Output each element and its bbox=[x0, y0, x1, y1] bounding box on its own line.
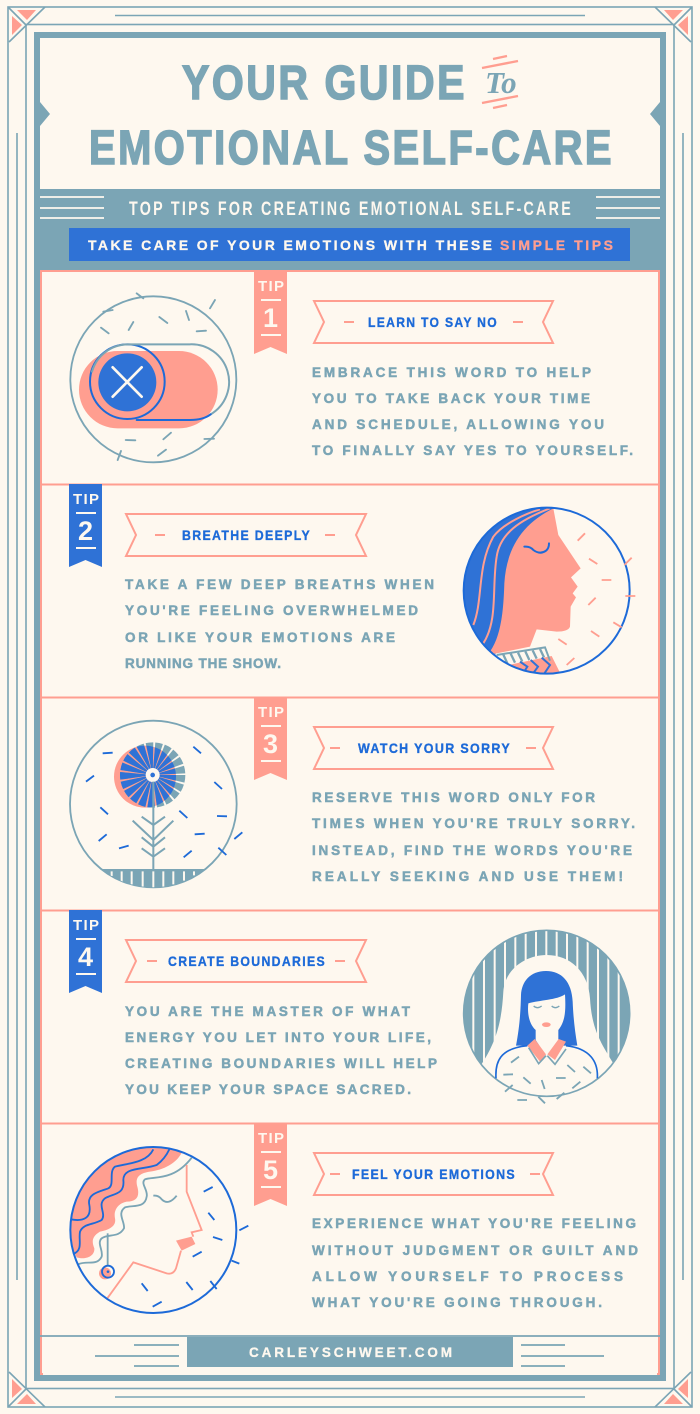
tip 3 text: RESERVE THIS WORD ONLY FOR bbox=[312, 790, 595, 805]
tip 1 text: TO FINALLY SAY YES TO YOURSELF. bbox=[312, 443, 633, 458]
icon: woman breathing profile bbox=[460, 507, 635, 677]
tip 3 ribbon bbox=[254, 698, 287, 780]
tip 1 ribbon: 1 bbox=[263, 303, 278, 333]
tip 3 heading: WATCH YOUR SORRY bbox=[358, 740, 511, 756]
panel outline bbox=[41, 271, 659, 1374]
tip 2 ribbon: 2 bbox=[78, 516, 93, 546]
tip 5 text: ALLOW YOURSELF TO PROCESS bbox=[312, 1269, 623, 1284]
tip 4 ribbon: TIP bbox=[73, 917, 99, 934]
tip 5 ribbon: 5 bbox=[263, 1155, 278, 1185]
tip 1 heading: LEARN TO SAY NO bbox=[368, 314, 498, 330]
tip 2 text bbox=[125, 577, 434, 671]
tip 4 text: YOU ARE THE MASTER OF WHAT bbox=[125, 1004, 411, 1019]
blue banner: SIMPLE TIPS bbox=[500, 237, 613, 253]
tip 1 ribbon: TIP bbox=[258, 278, 284, 295]
blue banner: TAKE CARE OF YOUR EMOTIONS WITH THESE bbox=[88, 237, 492, 253]
tip 5 ribbon: TIP bbox=[258, 1130, 284, 1147]
tip 2 text: YOU'RE FEELING OVERWHELMED bbox=[125, 603, 418, 618]
tip 4 ribbon: 4 bbox=[78, 942, 93, 972]
tip 2 heading bbox=[126, 514, 366, 556]
tip 1 text: EMBRACE THIS WORD TO HELP bbox=[312, 365, 591, 380]
tip 5 heading: FEEL YOUR EMOTIONS bbox=[352, 1166, 516, 1182]
tip 5 heading bbox=[314, 1153, 553, 1195]
tip 3 text: REALLY SEEKING AND USE THEM! bbox=[312, 869, 623, 884]
tip 2 ribbon bbox=[69, 484, 102, 567]
tip 4 text: ENERGY YOU LET INTO YOUR LIFE, bbox=[125, 1030, 431, 1045]
title word: to bbox=[482, 56, 518, 108]
panel: tip 5 bbox=[63, 1124, 638, 1313]
tip 5 ribbon bbox=[254, 1124, 287, 1206]
tip 1 text: YOU TO TAKE BACK YOUR TIME bbox=[312, 391, 590, 406]
footer label: CARLEYSCHWEET.COM bbox=[249, 1345, 452, 1360]
footer bbox=[40, 1336, 660, 1375]
icon: toggle switch bbox=[70, 293, 236, 462]
header band bbox=[40, 189, 660, 271]
panel: tip 3 bbox=[67, 698, 635, 889]
panel: tip 2 bbox=[69, 484, 635, 677]
tip 5 text: WHAT YOU'RE GOING THROUGH. bbox=[312, 1295, 602, 1310]
tip 2 ribbon: TIP bbox=[73, 491, 99, 508]
tip 1 heading bbox=[314, 301, 553, 343]
tip 1 ribbon bbox=[254, 271, 287, 354]
tip 3 text: TIMES WHEN YOU'RE TRULY SORRY. bbox=[312, 816, 635, 831]
tip 4 ribbon bbox=[69, 910, 102, 993]
tip 4 heading: CREATE BOUNDARIES bbox=[168, 953, 326, 969]
tip 4 text bbox=[125, 1004, 437, 1097]
tip 5 text: EXPERIENCE WHAT YOU'RE FEELING bbox=[312, 1216, 636, 1231]
tip 1 text: AND SCHEDULE, ALLOWING YOU bbox=[312, 417, 604, 432]
tip 2 text: OR LIKE YOUR EMOTIONS ARE bbox=[125, 630, 395, 645]
tip 2 text: RUNNING THE SHOW. bbox=[125, 656, 281, 671]
title block bbox=[40, 56, 660, 175]
panel: tip 1 bbox=[70, 271, 633, 462]
tip 5 text: WITHOUT JUDGMENT OR GUILT AND bbox=[312, 1243, 638, 1258]
tip 3 heading bbox=[314, 727, 553, 769]
icon: profile with wavy hair bbox=[63, 1147, 248, 1313]
tip 5 text bbox=[312, 1216, 638, 1310]
tip 4 heading bbox=[126, 940, 366, 982]
footer label bbox=[187, 1337, 513, 1367]
icon: flower bbox=[67, 721, 242, 889]
tip 2 text: TAKE A FEW DEEP BREATHS WHEN bbox=[125, 577, 434, 592]
icon: woman with boundary bbox=[460, 928, 633, 1103]
tip 3 ribbon: TIP bbox=[258, 704, 284, 721]
tip 3 ribbon: 3 bbox=[263, 729, 278, 759]
panel: tip 4 bbox=[69, 910, 633, 1103]
tip 4 text: YOU KEEP YOUR SPACE SACRED. bbox=[125, 1082, 411, 1097]
tip 3 text: INSTEAD, FIND THE WORDS YOU'RE bbox=[312, 843, 632, 858]
blue banner bbox=[69, 228, 630, 261]
title word: to: To bbox=[485, 65, 517, 100]
title line 1: YOUR GUIDE bbox=[182, 57, 467, 110]
tip 2 heading: BREATHE DEEPLY bbox=[182, 527, 311, 543]
tip 4 text: CREATING BOUNDARIES WILL HELP bbox=[125, 1056, 437, 1071]
tip 3 text bbox=[312, 790, 635, 884]
tip 1 text bbox=[312, 365, 633, 458]
